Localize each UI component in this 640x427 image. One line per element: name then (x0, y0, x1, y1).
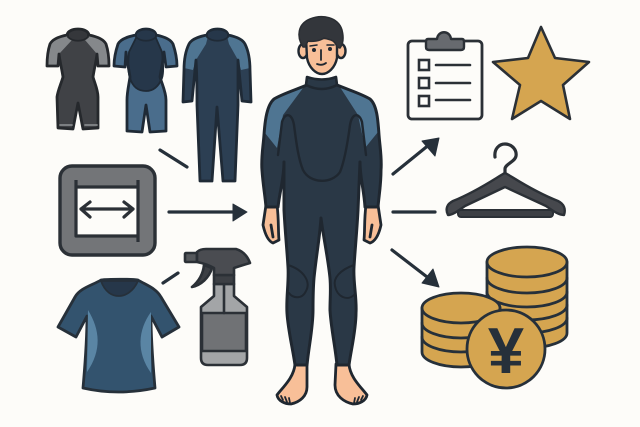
hands (263, 205, 381, 243)
person in wetsuit (262, 17, 381, 404)
wetsuit body (262, 85, 381, 365)
head (298, 17, 346, 74)
arrow: inputs to person (169, 204, 247, 221)
connector: shirt to spray (163, 273, 178, 283)
connector: suits to person (160, 150, 187, 167)
knee seams (288, 265, 355, 298)
icon: full navy wetsuit (183, 29, 251, 181)
icon: coin stacks with yen (422, 247, 567, 388)
icon: blue shorty wetsuit (114, 29, 177, 132)
icon: checklist clipboard (408, 32, 482, 119)
wetsuit outline (262, 85, 381, 365)
left coin stack (422, 293, 500, 367)
icon: grey shorty wetsuit (47, 29, 109, 129)
icon: gold star (493, 27, 589, 119)
yen coin (467, 310, 545, 388)
yen coin: ¥ (488, 314, 524, 387)
icon: rash guard shirt (58, 279, 179, 392)
icon: clothes hanger (447, 144, 565, 217)
arrow: up to quality (393, 138, 439, 174)
icon: measuring frame (60, 166, 155, 255)
arrow: down to cost (392, 250, 439, 287)
connector: person to hanger (393, 210, 435, 214)
right shoulder panel (338, 84, 378, 148)
chest seam (278, 115, 366, 181)
right coin stack (487, 247, 567, 348)
icon: double-headed arrow (81, 202, 133, 217)
collar (306, 77, 337, 89)
feet (277, 364, 367, 404)
left shoulder panel (265, 84, 306, 148)
icon: spray bottle (185, 249, 250, 365)
